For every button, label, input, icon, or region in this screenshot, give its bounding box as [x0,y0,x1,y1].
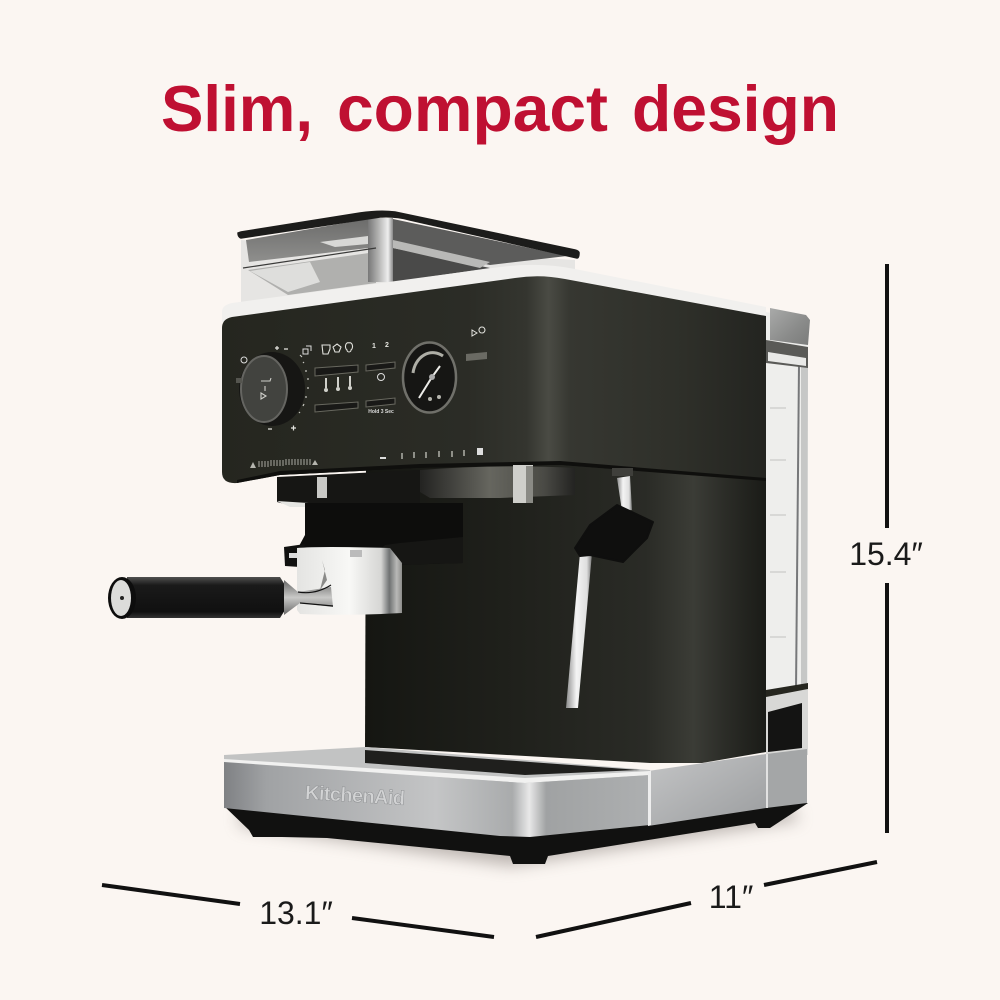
timer scale [402,450,464,459]
hopper [238,211,579,303]
lower body [365,460,766,763]
steel side [648,754,766,826]
grind icons [250,460,318,468]
steam wand [566,468,653,708]
title: compact [337,72,608,145]
ground shadow [240,806,800,866]
shot buttons: 1 [372,343,376,350]
steel front [224,762,650,837]
key icon [380,457,386,459]
espresso machine [108,211,810,866]
portafilter [108,547,402,619]
base [224,747,808,864]
handle [127,577,285,618]
grind scale [259,459,310,467]
shot buttons: 2 [385,342,389,349]
logo: KitchenAid [304,782,406,810]
title: Slim, [161,72,313,145]
title [161,72,839,145]
head panel [222,265,766,483]
title: design [632,72,839,145]
shot buttons [366,342,395,415]
dimension: width [102,885,494,937]
shot buttons: Hold 3 Sec [368,409,394,415]
pressure gauge [403,342,456,412]
handle tip [108,577,136,619]
drip tray [224,747,650,784]
portafilter bracket [284,503,463,567]
dimension: height: 15.4″ [849,536,923,572]
control dial [236,346,311,430]
lock icon [477,448,483,455]
black foot base [224,800,808,864]
drink buttons [315,343,358,412]
dimension: width: 13.1″ [259,895,333,931]
group head [277,465,575,507]
start button [466,327,487,361]
water tank [766,308,810,757]
dimension: depth: 11″ [709,879,753,915]
dimension: depth [536,862,877,937]
